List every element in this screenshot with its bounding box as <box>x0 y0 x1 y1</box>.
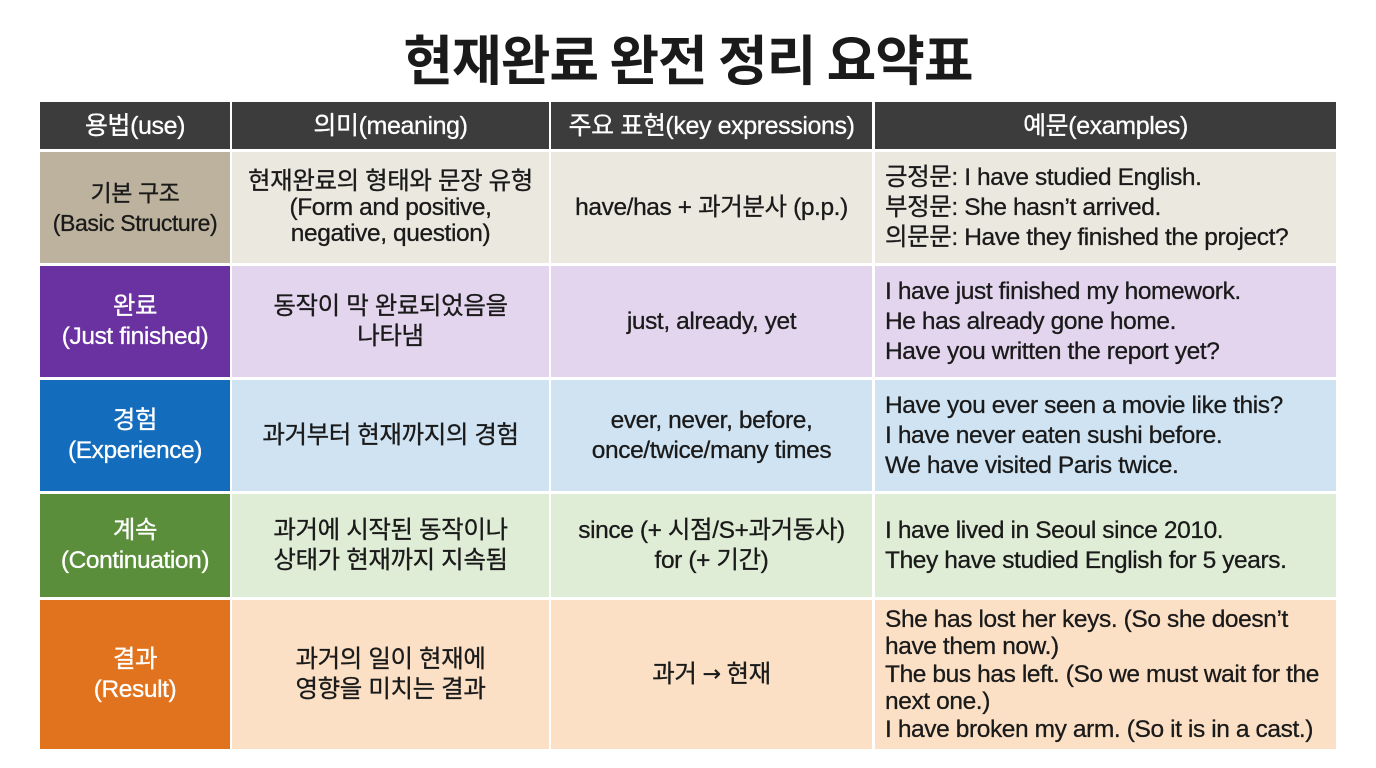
row: continuation: They have studied English for 5 years. <box>885 546 1287 574</box>
row: just finished: 동작이 막 완료되었음을 <box>273 292 508 320</box>
row: basic structure: (Form and positive, <box>289 194 492 220</box>
table <box>40 102 1336 749</box>
row: result: She has lost her keys. (So she doesn’t <box>885 606 1288 633</box>
header row: 주요 표현(key expressions) <box>568 112 855 140</box>
row: just finished: (Just finished) <box>62 322 208 350</box>
row: experience: ever, never, before, <box>611 406 812 434</box>
row: just finished: Have you written the report yet? <box>885 338 1219 364</box>
row: basic structure: 기본 구조 <box>90 180 180 206</box>
row: result: have them now.) <box>885 633 1059 660</box>
row: result: 영향을 미치는 결과 <box>296 676 485 702</box>
row: just finished: 나타냄 <box>357 322 424 350</box>
row: just finished: 완료 <box>113 292 157 320</box>
row: basic structure: have/has + 과거분사 (p.p.) <box>575 194 848 220</box>
row: experience: (Experience) <box>68 436 202 464</box>
row: basic structure: negative, question) <box>291 220 490 246</box>
row: experience <box>40 380 1336 491</box>
row: basic structure: 긍정문: I have studied English. <box>885 164 1202 190</box>
row: experience: once/twice/many times <box>592 436 831 464</box>
header row: 용법(use) <box>85 112 185 140</box>
row: experience: We have visited Paris twice. <box>885 452 1178 478</box>
row: basic structure: 부정문: She hasn’t arrived. <box>885 194 1161 220</box>
row: experience: I have never eaten sushi before. <box>885 422 1222 448</box>
row: basic structure <box>40 152 1336 263</box>
row: result: next one.) <box>885 688 990 715</box>
row: continuation: I have lived in Seoul since 2010. <box>885 516 1223 544</box>
row: continuation: (Continuation) <box>61 546 209 574</box>
row: experience: Have you ever seen a movie like this? <box>885 392 1283 418</box>
row: basic structure: (Basic Structure) <box>53 210 217 236</box>
row: just finished: He has already gone home. <box>885 308 1176 334</box>
row: continuation: 상태가 현재까지 지속됨 <box>273 546 508 574</box>
row: continuation <box>40 494 1336 597</box>
row: result: I have broken my arm. (So it is in a cast.) <box>885 716 1313 743</box>
row: continuation: since (+ 시점/S+과거동사) <box>578 516 845 544</box>
row: continuation: 과거에 시작된 동작이나 <box>273 516 508 544</box>
row: result: The bus has left. (So we must wait for the <box>885 661 1319 688</box>
row: continuation: for (+ 기간) <box>655 546 768 574</box>
row: result: (Result) <box>94 676 176 702</box>
row: just finished <box>40 266 1336 377</box>
row: experience: 과거부터 현재까지의 경험 <box>262 422 519 448</box>
row: result <box>40 600 1336 749</box>
row: result: 결과 <box>113 646 157 672</box>
row: basic structure: 의문문: Have they finished the project? <box>885 224 1288 250</box>
row: continuation: 계속 <box>113 516 157 544</box>
row: result: 과거의 일이 현재에 <box>296 646 485 672</box>
row: result: 과거 현재 <box>652 660 771 688</box>
row: result: → <box>702 662 721 686</box>
header row <box>40 102 1336 149</box>
header row: 의미(meaning) <box>313 112 468 140</box>
title: 현재완료 완전 정리 요약표 <box>403 17 973 96</box>
row: basic structure: 현재완료의 형태와 문장 유형 <box>248 168 533 194</box>
row: just finished: just, already, yet <box>627 308 796 334</box>
row: just finished: I have just finished my homework. <box>885 278 1241 304</box>
row: experience: 경험 <box>113 406 157 434</box>
header row: 예문(examples) <box>1023 112 1188 140</box>
